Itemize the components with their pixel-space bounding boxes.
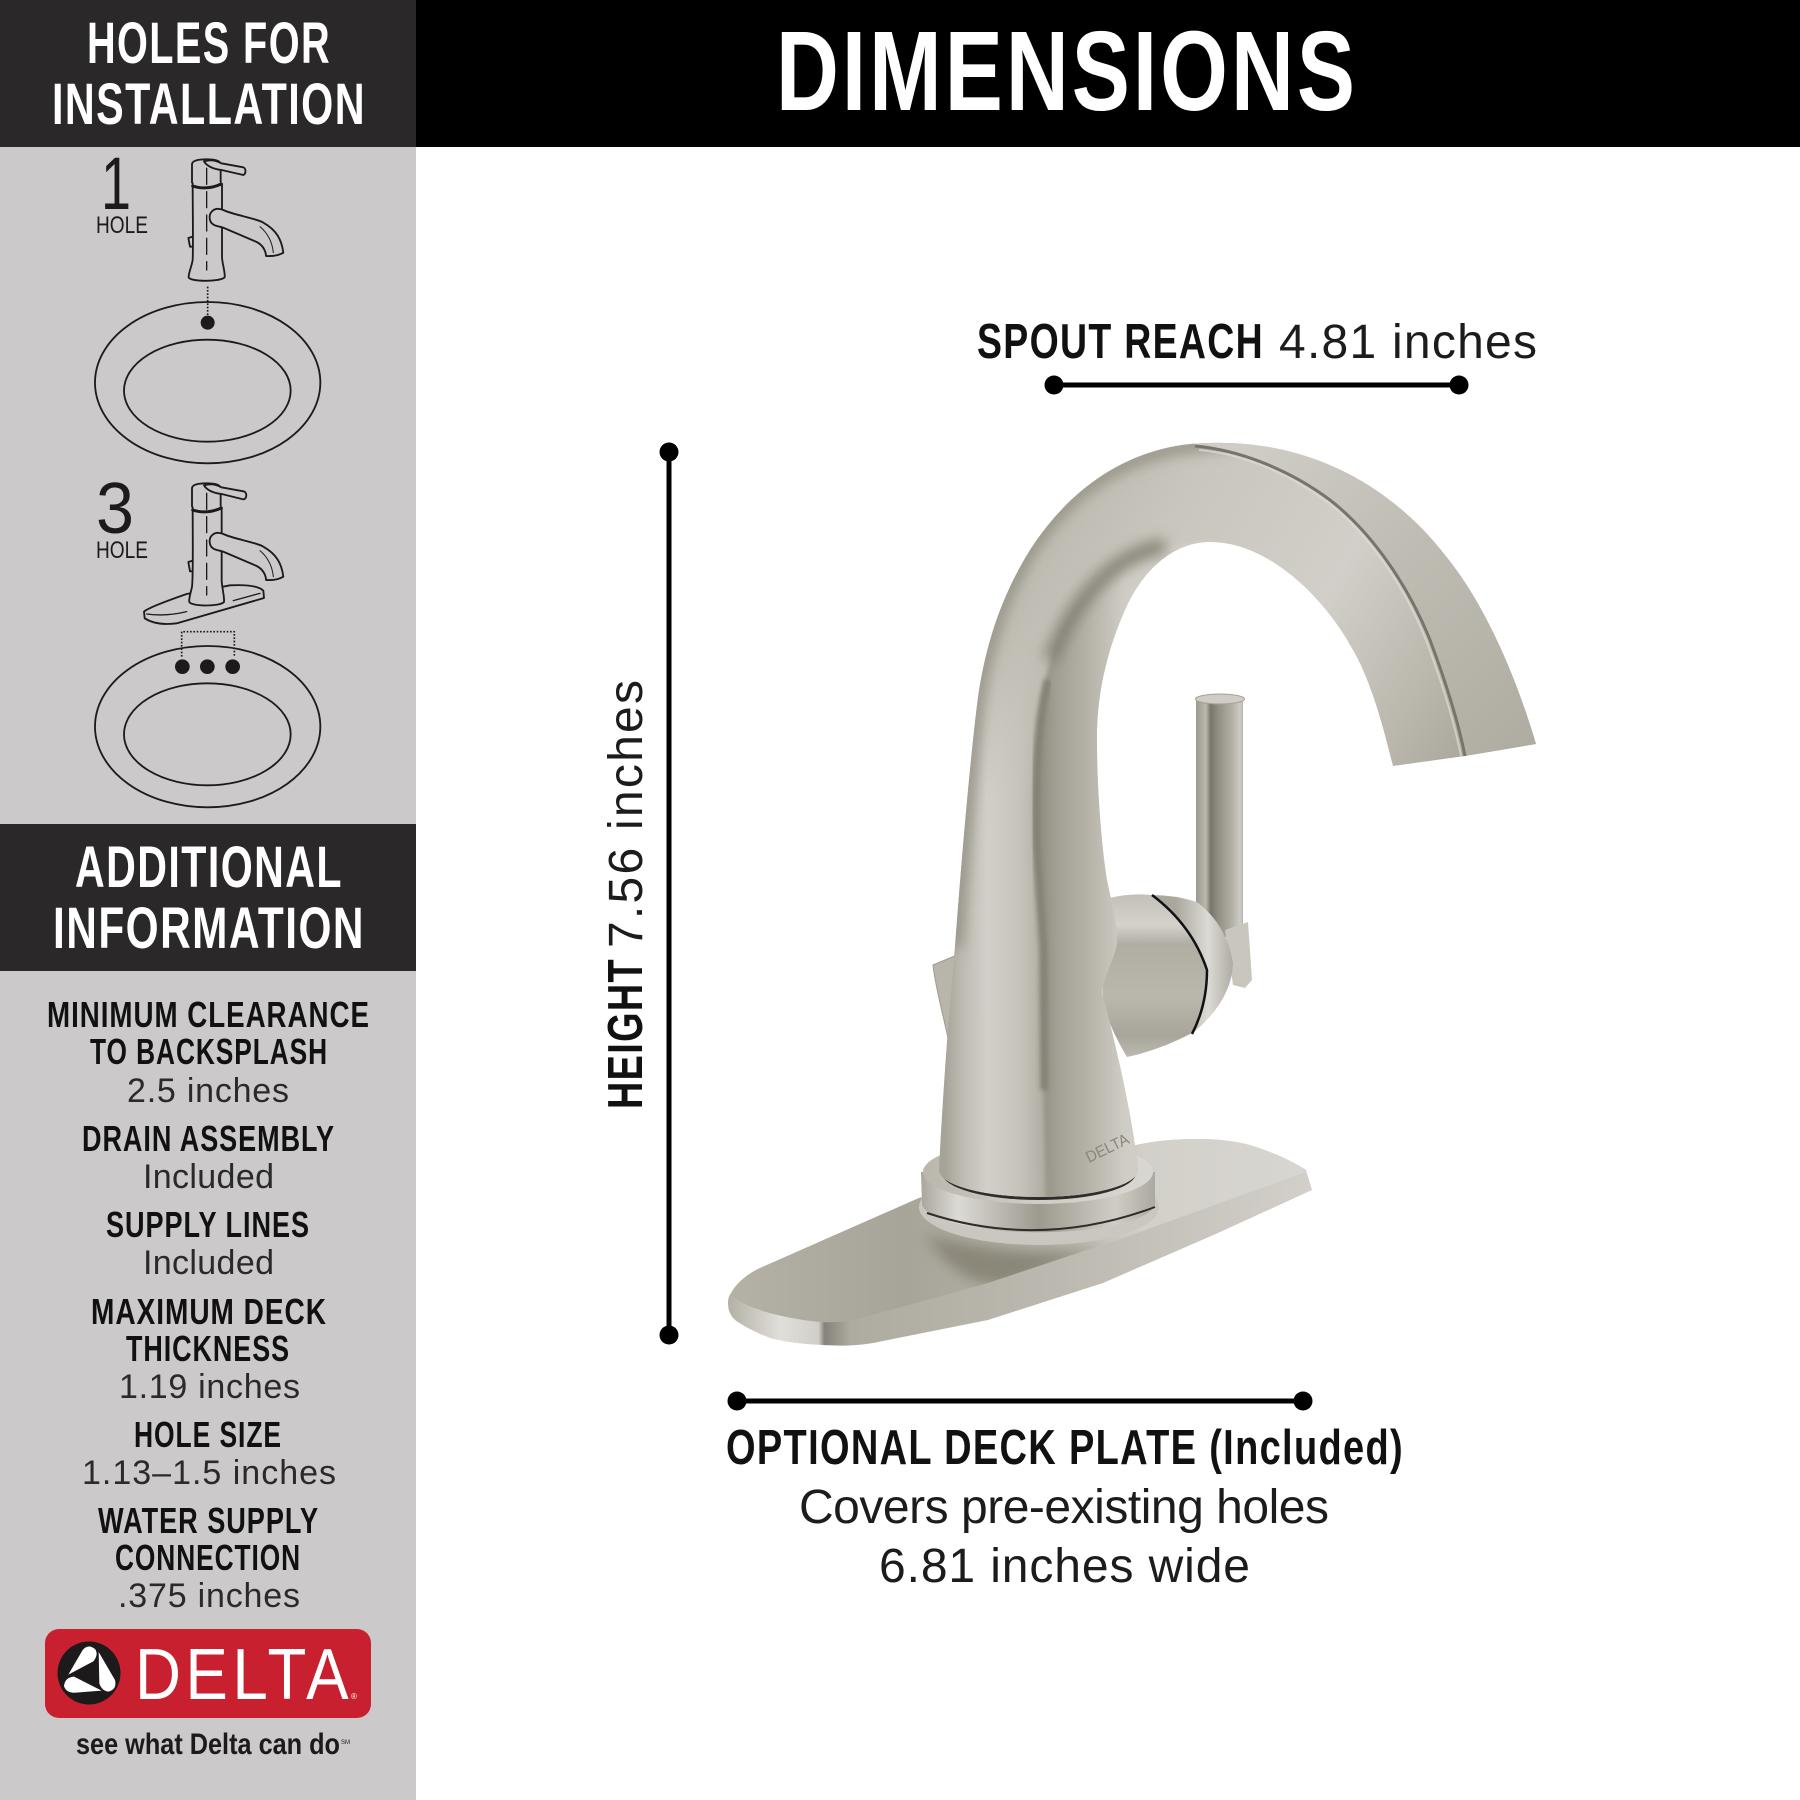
heading: additional information: ADDITIONAL xyxy=(75,835,343,900)
label: 1 hole: HOLE xyxy=(96,212,148,239)
text block: drain assembly: DRAIN ASSEMBLY xyxy=(82,1118,335,1159)
dimension: height: 7.56 inches xyxy=(600,680,653,948)
faucet illustration xyxy=(728,430,1560,1346)
dimension: deck plate: OPTIONAL DECK PLATE (Included) xyxy=(726,1421,1404,1475)
text block: water supply connection xyxy=(98,1500,319,1615)
heading: holes for installation xyxy=(0,0,416,147)
heading: holes for installation: HOLES FOR xyxy=(87,11,331,76)
icon: three-hole faucet, deck plate and sink xyxy=(95,483,320,807)
dimension: deck plate xyxy=(726,1392,1404,1593)
text block: hole size: 1.13–1.5 inches xyxy=(82,1454,336,1492)
icon: one-hole faucet and sink xyxy=(95,159,320,463)
text block: hole size: HOLE SIZE xyxy=(134,1414,282,1455)
faucet body and spout xyxy=(939,442,1536,1197)
engraved brand mark: DELTA xyxy=(1083,1131,1132,1167)
dimension: deck plate: 6.81 inches wide xyxy=(879,1540,1250,1593)
label: 3 hole xyxy=(96,469,148,564)
text block: minimum clearance: MINIMUM CLEARANCE xyxy=(47,994,370,1035)
text block: drain assembly: Included xyxy=(143,1158,274,1196)
dimension: spout reach: 4.81 inches xyxy=(1279,316,1537,369)
text block: water supply connection: .375 inches xyxy=(118,1577,300,1615)
logo: Delta: DELTA xyxy=(135,1635,353,1715)
dimension: spout reach xyxy=(977,315,1537,394)
title: dimensions: DIMENSIONS xyxy=(776,8,1358,134)
panel: left sidebar xyxy=(0,0,416,1800)
pop-up drain lever xyxy=(933,955,957,1038)
heading: holes for installation: INSTALLATION xyxy=(52,72,366,137)
handle cylinder and lever xyxy=(1100,694,1252,1057)
tagline: SM xyxy=(341,1740,350,1746)
deck plate xyxy=(728,1139,1312,1346)
text block: minimum clearance: TO BACKSPLASH xyxy=(90,1031,328,1072)
label: 3 hole: HOLE xyxy=(96,537,148,564)
label: 1 hole: 1 xyxy=(101,142,131,225)
base ring xyxy=(919,1140,1159,1245)
logo: Delta: ® xyxy=(351,1692,357,1701)
text block: maximum deck thickness: THICKNESS xyxy=(126,1328,290,1369)
dimension: height xyxy=(599,442,678,1344)
text block: maximum deck thickness: 1.19 inches xyxy=(119,1368,300,1406)
heading: additional information: INFORMATION xyxy=(53,896,365,961)
logo: Delta xyxy=(45,1629,371,1718)
tagline: see what Delta can do xyxy=(76,1728,340,1761)
dimension: deck plate: Covers pre-existing holes xyxy=(799,1481,1329,1534)
text block: water supply connection: CONNECTION xyxy=(115,1537,301,1578)
text block: minimum clearance: 2.5 inches xyxy=(127,1072,289,1110)
dimension: height: HEIGHT xyxy=(599,958,653,1109)
text block: water supply connection: WATER SUPPLY xyxy=(98,1500,319,1541)
title: dimensions xyxy=(416,0,1800,147)
text block: maximum deck thickness: MAXIMUM DECK xyxy=(91,1291,327,1332)
heading: additional information xyxy=(0,824,416,971)
text block: supply lines: Included xyxy=(143,1244,274,1282)
text block: supply lines xyxy=(106,1204,310,1282)
text block: maximum deck thickness xyxy=(91,1291,327,1406)
label: 1 hole xyxy=(96,142,148,239)
text block: minimum clearance xyxy=(47,994,370,1110)
label: 3 hole: 3 xyxy=(96,469,134,549)
text block: hole size xyxy=(82,1414,336,1492)
text block: drain assembly xyxy=(82,1118,335,1196)
dimension: spout reach: SPOUT REACH xyxy=(977,315,1264,369)
text block: supply lines: SUPPLY LINES xyxy=(106,1204,310,1245)
